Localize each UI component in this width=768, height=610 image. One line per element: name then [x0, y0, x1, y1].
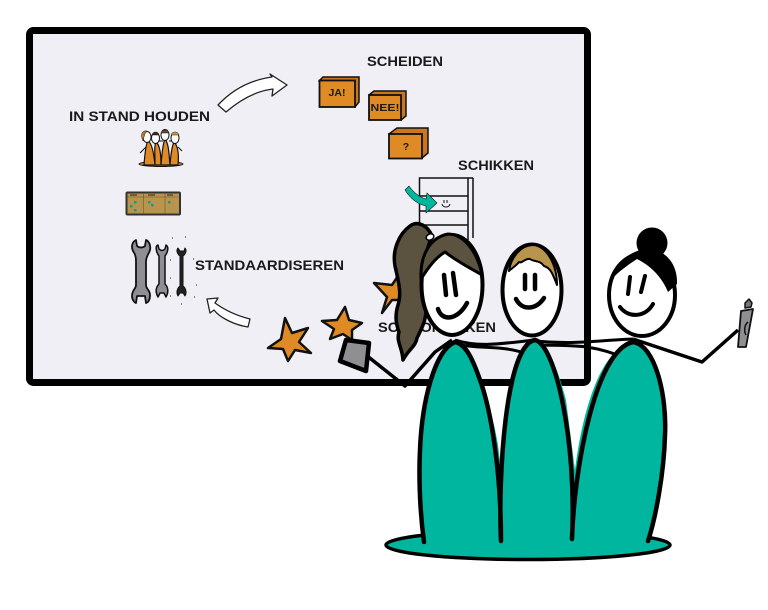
person: left arm and tablet: [340, 340, 452, 386]
person: left head: [421, 233, 482, 335]
hair: left figure: [421, 234, 482, 279]
icon: shelf smiley: [442, 200, 450, 207]
heading: in stand houden: IN STAND HOUDEN: [69, 108, 210, 124]
hair: middle figure: [509, 245, 557, 285]
person: right head: [609, 228, 677, 336]
face: middle figure: [516, 275, 544, 308]
icon: small wrench: [177, 248, 186, 296]
icon: wrenches: [132, 240, 186, 303]
box: question mark: ?: [403, 141, 409, 153]
heading: standaardiseren: STANDAARDISEREN: [195, 257, 344, 273]
face: left figure: [438, 273, 467, 317]
face: right figure: [620, 276, 653, 315]
icon: star right: [374, 270, 410, 313]
box: question mark: [389, 128, 428, 158]
icon: bottle: [738, 299, 753, 347]
icon: star left: [268, 318, 311, 361]
icon: tablet: [340, 340, 369, 371]
icon: large wrench: [132, 240, 150, 303]
whiteboard: [30, 30, 588, 382]
arrow: bottom: [207, 298, 250, 327]
arrow: top: [218, 74, 287, 112]
person: right arm and bottle: [633, 299, 753, 362]
box: ja: JA!: [329, 87, 345, 99]
icon: team: [139, 130, 183, 166]
icon: shelf: [419, 178, 473, 242]
body outlines: [419, 340, 665, 542]
person: middle head: [502, 244, 562, 336]
box: nee: NEE!: [370, 103, 400, 114]
box: nee: [369, 91, 406, 120]
icon: star middle: [322, 307, 362, 340]
hair tie: [425, 233, 435, 241]
heading: scheiden: SCHEIDEN: [367, 53, 443, 69]
heading: schikken: SCHIKKEN: [458, 157, 534, 173]
icon: medium wrench: [156, 245, 168, 297]
icon: ponytail: [394, 224, 432, 360]
icon: kanban board: [126, 192, 180, 214]
arms linking the figures: [455, 339, 633, 358]
icon: bun: [636, 228, 668, 258]
base ellipse: [386, 530, 670, 560]
box: ja: [319, 77, 359, 107]
hair: right figure: [611, 249, 677, 292]
icon: sparkle dots: [170, 237, 197, 304]
bodies fill: [419, 340, 665, 550]
heading: schoonmaken: SCHOONMAKEN: [378, 319, 496, 335]
arrow: teal shelf arrow: [405, 186, 437, 213]
